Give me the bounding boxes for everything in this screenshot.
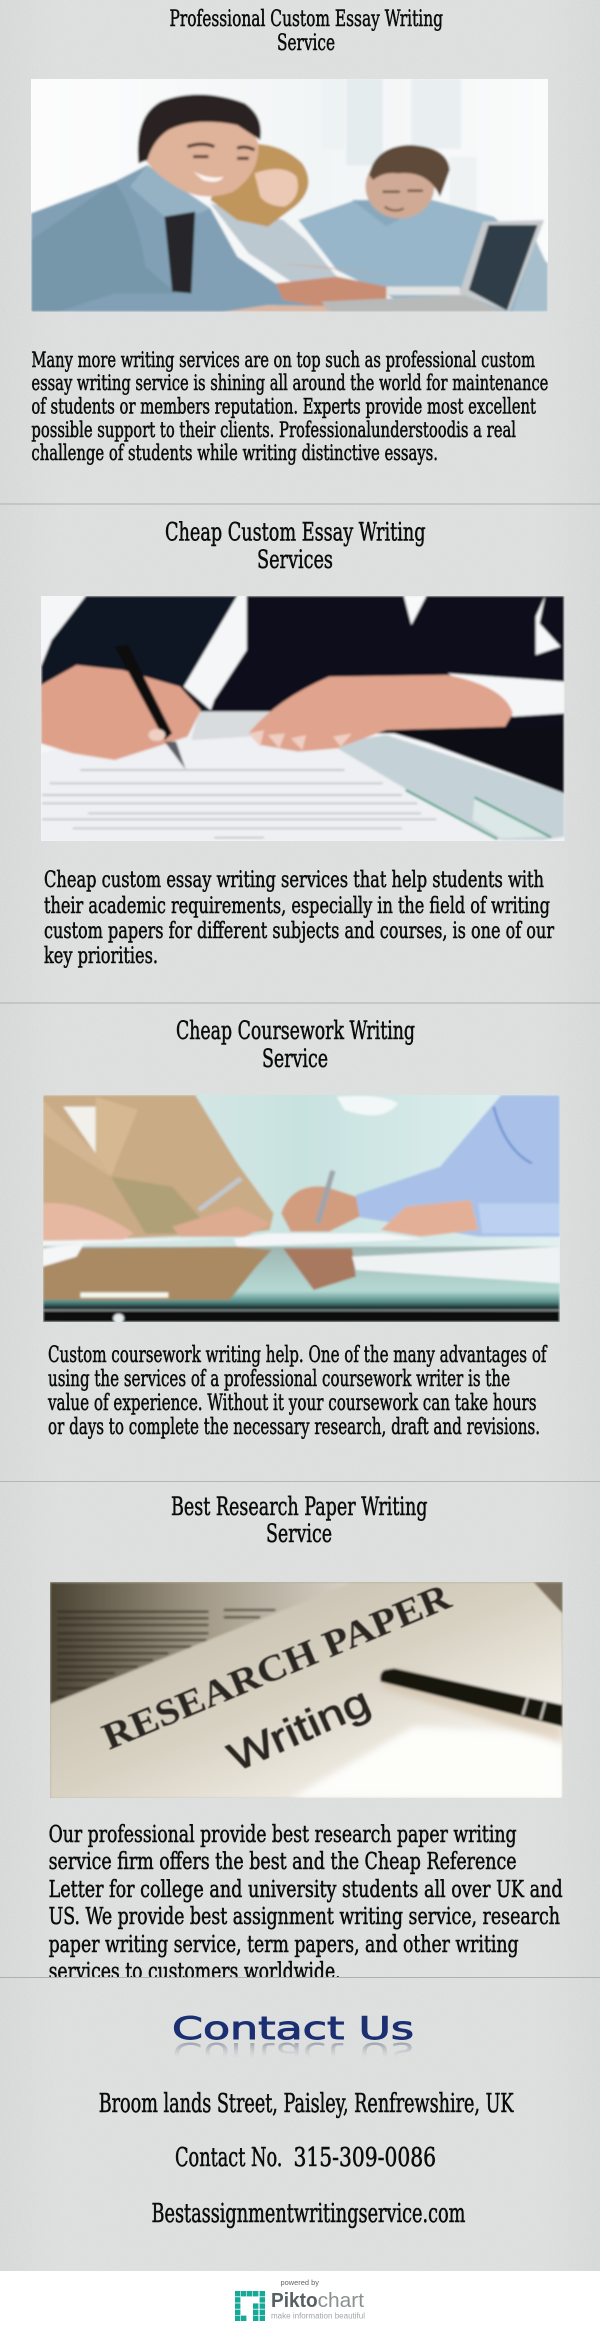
heading: section 1: Service xyxy=(277,30,335,56)
heading: contact us with reflection: Contact Us xyxy=(172,2035,414,2071)
paragraph: section 3 xyxy=(47,1343,548,1440)
icon: piktochart logo xyxy=(235,2291,265,2321)
table and paper xyxy=(202,710,270,712)
heading: section 4 xyxy=(171,1492,428,1549)
left hand xyxy=(41,665,201,760)
heading: section 4: Best Research Paper Writing xyxy=(171,1492,428,1522)
photo: hand signing a document with a pen xyxy=(36,592,568,844)
piktochart wordmark: chart xyxy=(318,2290,364,2312)
blazer xyxy=(43,1095,274,1242)
heading: section 2: Cheap Custom Essay Writing xyxy=(165,518,426,548)
heading: section 2 xyxy=(165,518,426,575)
powered by label: powered by xyxy=(280,2278,319,2287)
panel: professional custom essay writing service xyxy=(27,6,553,465)
paragraph: section 4: services to customers worldwide. xyxy=(49,1957,341,1985)
photo: research paper writing document with pen xyxy=(46,1576,566,1802)
heading: section 3: Cheap Coursework Writing xyxy=(176,1016,415,1046)
heading: section 3: Service xyxy=(262,1044,328,1074)
photo: two people signing papers on a glass table xyxy=(38,1092,564,1325)
blue shirt xyxy=(356,1095,560,1237)
heading: section 1 xyxy=(170,6,443,56)
text in photo: research paper: RESEARCH PAPER xyxy=(97,1576,458,1758)
panel: contact us xyxy=(0,1977,600,2271)
heading: section 2: Services xyxy=(257,545,333,575)
paragraph: section 2 xyxy=(44,868,554,969)
piktochart wordmark xyxy=(271,2290,364,2312)
panel: best research paper writing service xyxy=(46,1492,566,1985)
photo: three smiling students at a laptop xyxy=(27,75,553,315)
paragraph: section 1 xyxy=(31,348,548,465)
folder xyxy=(383,727,564,793)
laptop xyxy=(459,220,544,312)
paragraph: section 4 xyxy=(49,1820,563,1985)
man 2 xyxy=(298,200,548,312)
piktochart wordmark: Pikto xyxy=(271,2290,318,2312)
heading: section 3 xyxy=(176,1016,415,1074)
contact phone number xyxy=(175,2143,436,2173)
footer: powered by piktochart xyxy=(0,2271,600,2329)
heading: section 4: Service xyxy=(266,1519,332,1549)
panel: cheap coursework writing service xyxy=(38,1016,564,1440)
heading: contact us with reflection: Contact Us xyxy=(172,2011,414,2047)
woman xyxy=(210,203,337,287)
panel: cheap custom essay writing services xyxy=(36,518,568,969)
tagline: make information beautiful xyxy=(271,2312,365,2321)
table reflection xyxy=(43,1247,560,1310)
text in photo: writing: Writing xyxy=(222,1679,377,1780)
contact phone number: Contact No. xyxy=(175,2143,282,2173)
heading: contact us with reflection xyxy=(172,2011,414,2071)
paragraph: section 1: challenge of students while writing distinctive essays. xyxy=(31,441,438,465)
contact phone number: 315-309-0086 xyxy=(294,2143,436,2173)
cuff and right hand xyxy=(448,673,564,717)
paragraph: section 2: key priorities. xyxy=(44,944,158,969)
man 1 xyxy=(31,165,337,312)
paragraph: section 4: service firm offers the best and the Cheap Reference xyxy=(49,1847,517,1875)
papers xyxy=(43,1233,425,1247)
contact website: Bestassignmentwritingservice.com xyxy=(152,2199,465,2229)
heading: section 1: Professional Custom Essay Writing xyxy=(170,6,443,32)
